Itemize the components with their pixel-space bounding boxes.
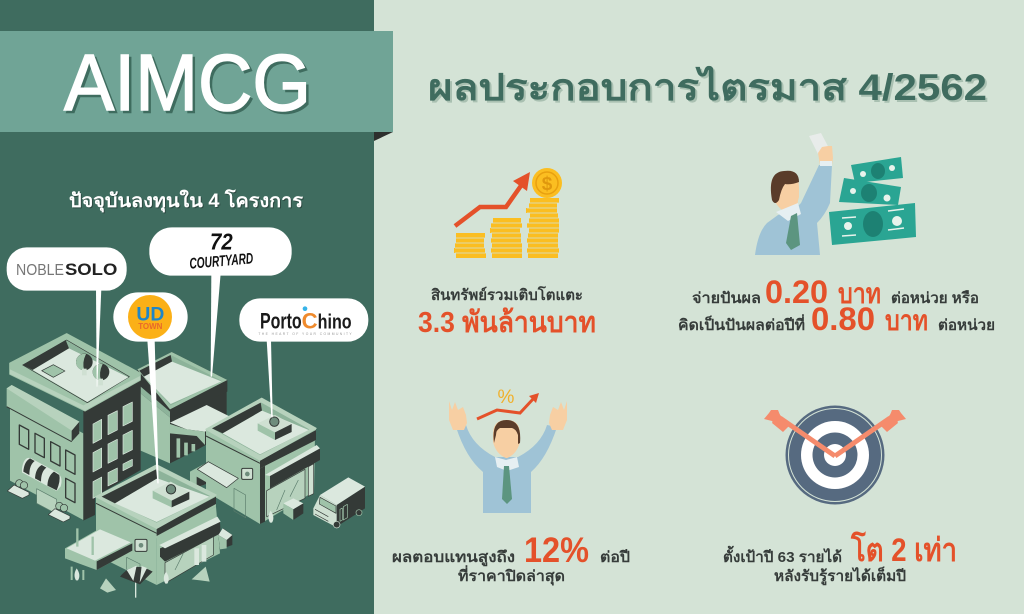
logo: UD Town: UD	[136, 305, 164, 326]
banknotes	[829, 157, 916, 245]
hair	[494, 420, 520, 444]
speech bubble: Noble Solo	[7, 247, 127, 387]
gold coin: $	[542, 174, 553, 195]
building: UD Town	[65, 465, 232, 585]
text block: dividend: บาท	[885, 305, 928, 336]
raised hand	[818, 146, 833, 165]
text block: dividend: ต่อหน่วย	[938, 317, 995, 334]
building: 72 Courtyard	[137, 352, 230, 463]
text block: total assets: 3.3 พันล้านบาท	[418, 307, 596, 339]
heading: quarterly results: ผลประกอบการไตรมาส 4/2562	[430, 67, 989, 110]
title: AIMCG: AIMCG	[64, 38, 311, 127]
text block: dividend: บาท	[838, 278, 881, 309]
delivery van	[313, 477, 365, 528]
logo: Porto Chino: Porto	[260, 308, 302, 333]
subheading: four projects: ปัจจุบันลงทุนใน 4 โครงการ	[69, 189, 304, 213]
speech bubble: Porto Chino	[239, 298, 368, 417]
subheading: four projects: ปัจจุบันลงทุนใน 4 โครงการ	[70, 190, 305, 214]
text block: return: ที่ราคาปิดล่าสุด	[458, 565, 565, 586]
logo: UD Town	[128, 295, 172, 339]
collar	[776, 203, 801, 221]
logo: Noble Solo	[16, 260, 117, 279]
logo: 72 Courtyard: 72	[210, 228, 233, 254]
logo: UD Town: TOWN	[138, 322, 163, 331]
text block: dividend: จ่ายปันผล	[692, 290, 761, 307]
logo: Noble Solo: SOLO	[65, 260, 117, 279]
striped shop awning	[22, 458, 62, 491]
logo: Porto Chino: C	[302, 308, 318, 333]
neck and face	[771, 173, 799, 218]
logo: 72 Courtyard	[189, 228, 254, 273]
logo: Porto Chino	[258, 306, 352, 336]
text block: revenue target	[723, 531, 957, 586]
trees	[74, 511, 273, 584]
text block: total assets	[418, 285, 596, 339]
text block: dividend: คิดเป็นปันผลต่อปีที่	[678, 314, 805, 334]
speech bubble: 72 Courtyard	[149, 227, 292, 377]
collar and tie	[495, 457, 519, 471]
face	[493, 420, 520, 458]
text block: dividend: 0.80	[811, 301, 875, 337]
isometric buildings illustration	[7, 227, 368, 598]
coin stacks	[454, 198, 559, 258]
necktie	[786, 213, 800, 250]
percent sign: %	[498, 387, 515, 408]
logo: 72 Courtyard: COURTYARD	[189, 250, 254, 273]
heading: quarterly results: ผลประกอบการไตรมาส 4/2562	[428, 65, 987, 108]
text block: total assets: สินทรัพย์รวมเติบโตแตะ	[431, 285, 583, 304]
text block: dividend: 0.20	[765, 274, 828, 310]
speech bubble: UD Town	[113, 292, 188, 483]
logo: Noble Solo: NOBLE	[16, 262, 64, 279]
man body	[755, 165, 832, 255]
text block: return: ผลตอบแทนสูงถึง	[392, 548, 515, 567]
text block: return: ต่อปี	[600, 549, 630, 566]
arrows	[764, 410, 906, 456]
text block: return: 12%	[524, 531, 589, 570]
text block: revenue target: หลังรับรู้รายได้เต็มปี	[774, 566, 906, 586]
building: Porto Chino	[190, 398, 320, 524]
cardboard box	[283, 498, 303, 520]
receipt	[809, 133, 830, 154]
title: AIMCG: AIMCG	[66, 40, 314, 130]
growth arrow	[455, 172, 530, 226]
parasol and deck chairs	[100, 566, 210, 598]
logo: Porto Chino: hino	[318, 311, 352, 333]
left panel	[0, 0, 374, 614]
building: Noble Solo	[7, 334, 141, 522]
body and arms	[456, 425, 557, 513]
hands	[449, 401, 567, 430]
logo: Porto Chino: THE HEART OF YOUR COMMUNITY	[258, 332, 352, 336]
icon: coins and growth arrow	[454, 168, 562, 258]
text block: revenue target: โต 2 เท่า	[850, 531, 957, 568]
text block: dividend: ต่อหน่วย หรือ	[891, 290, 979, 307]
text block: dividend	[678, 274, 995, 337]
hair	[771, 171, 799, 203]
text block: revenue target: ตั้งเป้าปี 63 รายได้	[723, 545, 842, 566]
ribbon banner	[0, 31, 393, 141]
icon: man holding receipt with banknotes	[755, 133, 916, 255]
arrow	[477, 393, 539, 419]
icon: target with arrows	[764, 406, 906, 504]
text block: return	[392, 531, 630, 586]
icon: man with raised arms and percent arrow	[449, 387, 567, 513]
